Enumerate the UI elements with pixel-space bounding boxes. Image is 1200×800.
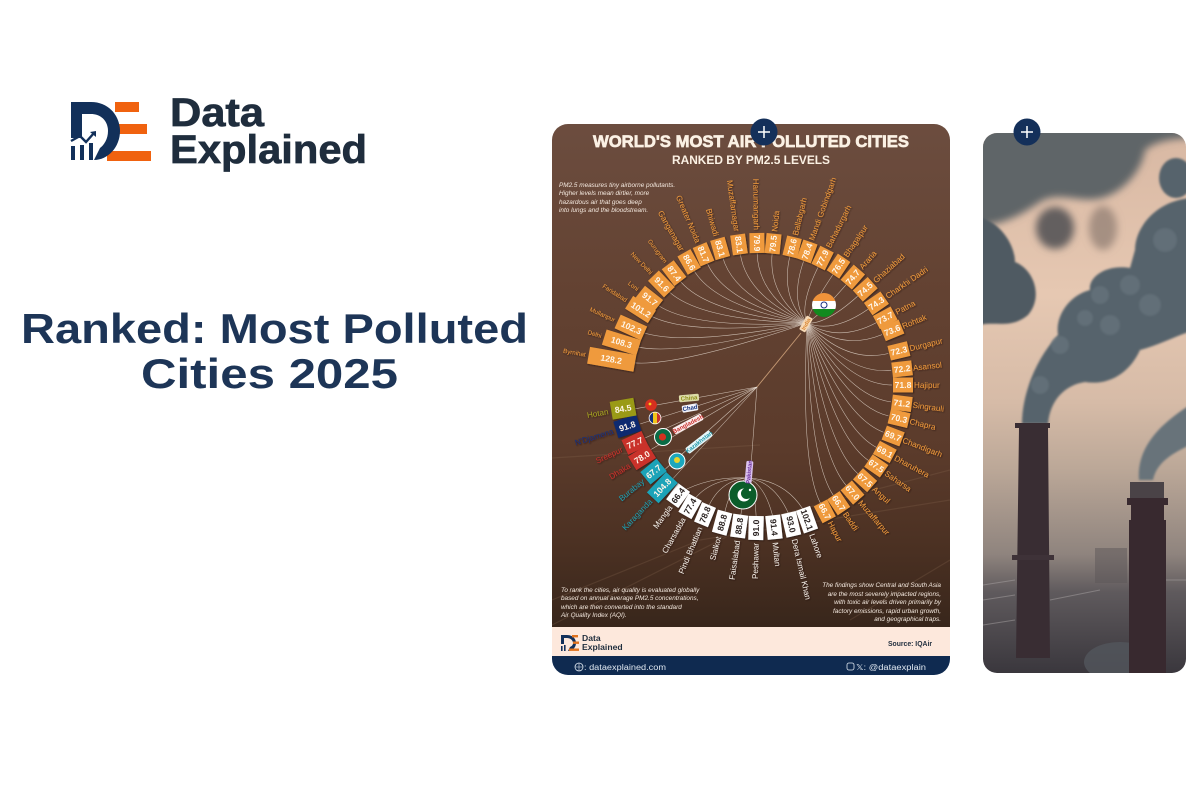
chart: India bars: Chapra [909,417,937,432]
chart: India bars: 74.5 [856,280,875,299]
findings note: and geographical traps. [874,616,941,623]
logo mark: DE monogram [71,102,151,161]
icon: Kazakhstan flag [669,453,685,469]
label: India [799,315,813,333]
chart: India bars: Hanumangarh [751,179,761,230]
findings note: with toxic air levels driven primarily by [834,599,942,606]
chart: India bars: 87.4 [665,264,684,283]
chart: India bars: Delhi [587,329,602,340]
chart: India bars: 67.5 [855,471,875,490]
chart: Pakistan bars: 66.4 [669,486,687,505]
chart: India bars: 67.5 [867,457,886,475]
chart: India bars: 69.7 [884,428,903,444]
intro note [559,182,675,214]
chart: India bars: 91.6 [652,275,671,294]
connector lines: India [628,252,892,503]
heading: Ranked: Most Polluted [21,305,528,352]
chart: India bars: Mandi Gobindgarh [807,176,838,242]
heading [21,305,528,397]
chart: India bars: Angul [870,485,892,506]
chart: India bars: 70.3 [890,412,909,425]
icon: Bangladesh flag [654,428,672,446]
chart: India bars: 78.4 [800,242,815,261]
chart: India bars: Patna [894,299,917,317]
chart: India bars: Baddi [841,510,860,533]
ground [983,548,1186,682]
chart: India bars: Gurugram [646,238,668,265]
chart: India bars: Bhagalpur [842,223,870,259]
chart: Pakistan bars: Charsadda [660,516,688,555]
chart: India bars: Noida [770,210,781,232]
second plume [1139,405,1190,480]
chart: India bars: 67.0 [843,483,862,502]
icon: China flag [645,399,657,411]
findings note: factory emissions, rapid urban growth, [833,608,941,615]
chart: India bars: Araria [858,249,879,271]
intro note: hazardous air that goes deep [559,199,642,206]
chart: India bars: 81.7 [696,245,711,264]
chart: India bars: 79.5 [767,235,779,253]
chart: India bars: 77.9 [814,248,831,268]
method note: based on annual average PM2.5 concentrations, [561,595,699,602]
chart: other country bars: 77.7 [625,435,645,451]
chart: India bars: Asansol [913,361,942,373]
chart: India bars: Muzaffarnagar [725,179,741,233]
chart: India bars: 73.6 [883,322,902,338]
findings note [822,582,942,623]
chart: India bars: 86.6 [681,253,698,272]
source: Source: IQAir [888,639,932,648]
chart: India bars: 69.1 [875,444,895,460]
poster title [593,132,909,167]
chart: Pakistan bars: Faisalabad [728,540,742,580]
right chimney [1127,482,1168,673]
chart: India bars: Ballabgarh [791,197,809,236]
chart: other country bars: 91.8 [618,419,637,434]
chart: India bars: 128.2 [600,352,623,366]
method note: To rank the cities, air quality is evaluated globally [561,587,700,594]
chart: India bars: Hapur [826,520,844,544]
chart: India bars: Byrnihat [563,348,586,359]
chart: India bars: 78.6 [785,237,799,256]
chart: India bars: Charkhi Dadri [884,265,930,301]
chart: India bars: 79.9 [752,235,762,252]
chart: India bars: 83.1 [713,239,727,258]
chart: India bars: Chandigarh [901,436,944,459]
left chimney [1015,423,1050,658]
chart: India bars: Dharuhera [893,454,931,480]
social handle: 𝕏: @dataexplain [856,663,926,672]
chart: India bars: 74.3 [867,294,886,312]
chart: Pakistan bars: 102.1 [799,508,815,532]
photo: smokestacks [983,133,1186,673]
findings note: The findings show Central and South Asia [822,582,941,589]
chart: India bars: Rohtak [901,312,929,331]
intro note: Higher levels mean dirtier, more [559,190,650,197]
label: Chad: Chad [682,405,698,413]
chart: India bars: 91.7 [640,290,660,308]
chart: Pakistan bars: Peshawar [751,543,761,579]
chart: India bars: 66.7 [830,493,848,513]
label: China [679,394,699,403]
chart: India bars: 83.1 [733,235,745,254]
main plume [1022,158,1195,424]
chart: India bars: 72.3 [890,344,908,358]
chart: India bars: 101.2 [629,300,653,320]
heading: Cities 2025 [141,350,398,397]
footer logo: Data [582,633,601,643]
chart: India bars: Durgapur [909,336,944,353]
chart: Pakistan bars: 78.8 [697,505,713,524]
chart: Pakistan bars: Lahore [807,533,824,560]
poster title: RANKED BY PM2.5 LEVELS [672,155,830,167]
footer logo [561,633,623,652]
intro note: into lungs and the bloodstream. [559,207,648,214]
chart: India bars: Mullanpur [588,306,616,324]
button: plus on photo [1014,118,1040,146]
chart: India bars: Loni [626,280,640,293]
left cloud [983,218,1038,326]
chart: India bars: Faridabad [601,283,629,304]
method note: Air Quality Index (AQI). [560,612,627,619]
chart: India bars: Ghaziabad [872,252,907,285]
connector lines: Pakistan [680,478,804,518]
logo wordmark: Explained [170,128,367,172]
chart: other country bars: 84.5 [614,402,632,415]
plume highlights [1031,228,1177,394]
chart: other country bars: 67.7 [644,462,663,481]
connector lines: other countries [634,333,801,484]
poster title: WORLD'S MOST AIR POLLUTED CITIES [593,132,909,151]
chart: other country bars: 78.0 [632,448,652,466]
button: plus on poster [750,118,778,146]
chart: India bars: Muzaffarpur [856,499,891,537]
chart: India bars [562,175,945,545]
chart: India bars: Bahadurgarh [824,204,853,250]
chart: Pakistan bars: 93.0 [784,515,798,534]
chart: other country bars [572,398,678,534]
chart: India bars: 72.2 [893,363,911,375]
chart: other country bars: Hotan [586,407,609,420]
chart: India bars: Ganganagar [656,209,686,253]
label: Pakistan: Pakistan [746,459,754,484]
method note [560,587,700,619]
chart: Pakistan bars: 91.0 [751,519,761,536]
chart: Pakistan bars: 88.8 [715,513,729,532]
logo: Data Explained [71,91,367,172]
label: Kazakhstan: Kazakhstan [685,430,715,455]
icon: Chad flag [649,412,661,424]
chart: India bars: 76.5 [830,256,847,276]
chart: India bars: 71.2 [893,397,911,409]
chart: India bars: 74.7 [844,267,862,287]
logo wordmark: Data [170,91,265,135]
chart: India bars: 73.7 [876,309,895,326]
label: Bangladesh: Bangladesh [672,414,705,436]
chart: other country bars: 104.8 [651,476,673,499]
chart: India bars: Singrauli [912,401,945,414]
chart: India bars: 66.7 [817,502,833,521]
chart: Pakistan bars: 77.4 [682,496,699,516]
footer logo: Explained [582,642,623,652]
label: China: China [681,395,698,403]
chart: other country bars: Dhaka [608,461,633,481]
chart: India bars: Greater Noida [674,194,702,245]
panel: infographic poster [552,124,950,675]
chart: Pakistan bars: Sialkot [708,535,723,561]
intro note: PM2.5 measures tiny airborne pollutants. [559,182,675,189]
chart: other country bars: Burabay [617,477,647,503]
method note: which are then converted into the standard [561,604,682,611]
logo wordmark [170,91,367,172]
chart: Pakistan bars: Dera Ismail Khan [790,538,812,601]
icon: India flag [812,293,836,317]
chart: Pakistan bars: 91.4 [768,518,780,536]
chart: other country bars: Karaganda [621,497,655,532]
chart: India bars: 102.3 [619,319,643,337]
label: India: India [801,317,813,332]
chart: India bars: 71.8 [895,380,912,390]
chart: Pakistan bars: Multan [771,542,782,567]
chart: other country bars: N'Djamena [574,427,615,447]
chart: Pakistan bars [649,483,828,601]
chart: Pakistan bars: Mangla [652,503,675,530]
icon: Pakistan flag [729,481,757,509]
top clouds [983,133,1186,254]
chart: Pakistan bars: 88.8 [733,517,745,535]
chart: India bars: 108.3 [610,334,633,350]
website: : dataexplained.com [584,663,666,672]
chart: Pakistan bars: Pindi Bhattian [677,526,704,575]
chart: India bars: Bhiwadi [704,208,720,237]
chart: India bars: Saharsa [883,469,913,494]
chart: India bars: New Delhi [629,251,653,276]
findings note: are the most severely impacted regions, [828,591,941,598]
chart: other country bars: Sreepur [594,445,625,466]
chart: India bars: Hajipur [914,381,940,390]
